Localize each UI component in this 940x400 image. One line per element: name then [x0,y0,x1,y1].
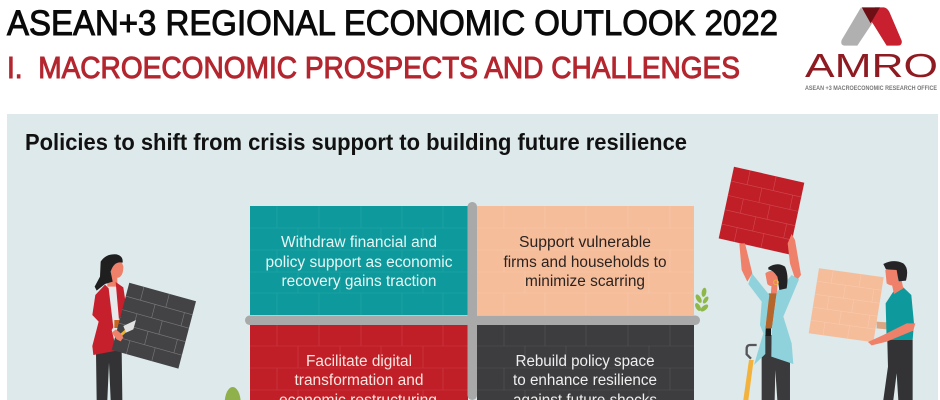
logo: AMRO [805,7,938,92]
quadrant text: Facilitate digital [306,353,412,370]
panel: policies background [7,114,938,400]
title: ASEAN+3 REGIONAL ECONOMIC OUTLOOK 2022 [7,4,778,43]
quadrant text [279,353,437,400]
quadrant text: transformation and [294,372,424,389]
quadrant text: recovery gains traction [282,273,436,290]
quadrant text: minimize scarring [525,273,645,290]
trowel and hand [112,320,136,341]
quadrant: rebuild policy space [477,325,694,400]
quadrant text: firms and households to [504,254,666,271]
quadrant: support vulnerable [477,206,694,315]
quadrant text: Withdraw financial and [281,234,437,251]
subtitle: I. MACROECONOMIC PROSPECTS AND CHALLENGES [7,50,740,85]
quadrant text [513,353,657,400]
quadrant text [266,234,453,290]
quadrant: withdraw support [250,206,468,315]
woman body [739,234,801,400]
logo wordmark: AMRO [805,47,938,84]
quadrant text: to enhance resilience [513,372,657,389]
icon: left plant [225,387,241,400]
figure: woman lifting red brick wall [719,167,804,400]
woman body [92,254,126,400]
panel heading: Policies to shift from crisis support to building future resilience [25,129,687,155]
man upper body [868,261,915,345]
quadrant text: Support vulnerable [519,234,651,251]
figure: man carrying peach brick wall [809,261,915,400]
grid cross bars [245,202,700,400]
shovel [743,345,757,400]
icon: right plant [694,287,710,313]
quadrant: digital transformation [250,325,468,400]
logo mark [841,7,902,46]
peach brick wall [809,268,884,342]
red brick wall [719,167,804,254]
man back [877,322,913,400]
dark brick wall [112,283,196,369]
quadrant text [504,234,666,290]
figure: woman with dark brick wall [92,254,196,400]
quadrant text: Rebuild policy space [516,353,654,370]
quadrant text: policy support as economic [266,254,453,271]
